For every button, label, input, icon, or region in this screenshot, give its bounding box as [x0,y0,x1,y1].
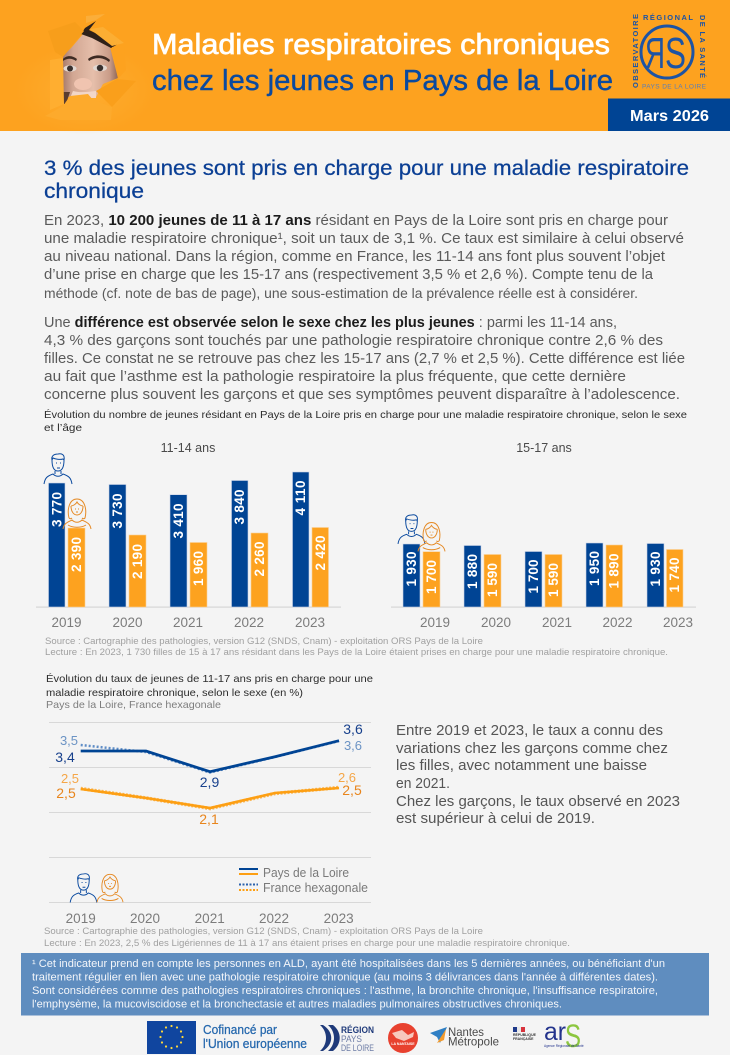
line chart: rate by sex: 2,6 [338,770,356,785]
legend: France hexagonale [263,881,368,895]
logo: République française: FRANÇAISE [513,1037,534,1041]
logo: Nantes Métropole: Métropole [448,1034,499,1048]
bar chart: 15-17 ans: 1 880 [465,554,480,589]
bar chart: 11-14 ans: 11-14 ans [161,441,215,455]
logo: observatoire régional de la santé [631,13,707,90]
logo: European Union co-funding: Cofinancé par [203,1023,277,1037]
bar chart: 15-17 ans: 1 700 [526,560,541,594]
commentary text: Entre 2019 et 2023, le taux a connu des [396,723,663,739]
logo: La Nantaise red badge: LA NANTAISE [391,1042,415,1046]
logo: Région Pays de la Loire: DE LOIRE [341,1043,374,1053]
section heading [44,156,689,203]
logo: observatoire régional de la santé: DE LA SANTÉ [698,15,707,78]
bar chart: 15-17 ans: 1 590 [485,563,500,597]
line chart: rate by sex: 2,9 [200,774,219,790]
bar chart: 15-17 ans: 1 930 [404,552,419,586]
bar chart heading: Évolution du nombre de jeunes résidant en Pays de la Loire pris en charge pour une maladie respiratoire chronique, selon le sexe [44,408,687,421]
bar chart: 11-14 ans: 2 390 [69,537,84,572]
text block: second paragraph: concerne plus souvent les garçons et que ses symptômes peuvent disparaître à l’adolescence. [44,386,680,403]
bar chart: 15-17 ans: 1 740 [667,558,682,592]
logo: Région Pays de la Loire: PAYS [341,1034,362,1044]
text block: second paragraph: au fait que l’asthme est la pathologie respiratoire la plus fréquente, que cette dernière [44,368,626,385]
logo: ARS: ar [544,1018,566,1046]
commentary text: les filles, avec notamment une baisse [396,758,647,774]
bar chart: 11-14 ans: 2019 [51,615,82,630]
bar chart: 11-14 ans: 4 110 [293,480,308,516]
line chart: rate by sex: 2019 [66,911,96,926]
date tag [608,98,730,131]
text block: first paragraph: au niveau national. Dans la région, comme en France, les 11-14 ans font plus souvent l’objet [44,248,666,265]
logo: observatoire régional de la santé: PAYS DE LA LOIRE [642,84,707,90]
photo: face peering through torn paper [45,14,136,120]
bar chart: 11-14 ans: 1 960 [191,551,206,586]
logo: observatoire régional de la santé: OBSERVATOIRE [631,14,640,88]
logo: République française [513,1027,537,1041]
bar chart: 11-14 ans: 2 190 [130,544,145,579]
bar chart: 11-14 ans: 3 770 [50,492,64,527]
bar chart: 15-17 ans: 1 930 [648,552,663,586]
commentary text: variations chez les garçons comme chez [396,741,668,757]
section heading: chronique [44,179,144,203]
logo: La Nantaise red badge [388,1023,418,1053]
bar chart: 15-17 ans: 2022 [602,615,633,630]
commentary text [396,723,680,827]
bar chart: 11-14 ans: 3 840 [232,490,247,524]
logo: observatoire régional de la santé: S [665,29,686,78]
legend [239,866,368,895]
title: Maladies respiratoires chroniques [152,29,610,61]
footnote panel: traitement régulier en lien avec une pathologie respiratoire chronique (au moins 3 délivrances dans l'année à différentes dates). [32,972,658,984]
line chart: rate by sex: 3,6 [343,721,363,737]
line chart: rate by sex: 2,1 [199,811,219,827]
line chart: rate by sex: 2020 [130,911,160,926]
logo: observatoire régional de la santé: R [645,29,665,78]
line chart: rate by sex: 2023 [324,911,354,926]
commentary text: est supérieur à celui de 2019. [396,811,595,827]
source note: line chart [44,926,570,949]
bar chart: 11-14 ans: 3 410 [171,504,186,538]
source note: bar chart: Source : Cartographie des pathologies, version G12 (SNDS, Cnam) - exploitation ORS Pays de la Loire [45,636,483,647]
source note: line chart: Lecture : En 2023, 2,5 % des Ligériennes de 11 à 17 ans étaient prises en charge pour une maladie respiratoire chronique. [44,938,570,949]
logo: République française: RÉPUBLIQUE [513,1032,537,1037]
bar chart: 15-17 ans: 15-17 ans [516,441,572,455]
line chart: rate by sex: 3,6 [344,738,362,753]
text block: second paragraph: filles. Ce constat ne se retrouve pas chez les 15-17 ans (2,7 % et 2,5 %). Cette différence est liée [44,350,685,367]
bar chart heading: et l’âge [44,422,82,434]
bar chart: 15-17 ans: 1 700 [424,560,439,594]
footnote panel [21,953,709,1016]
logo: ARS: Agence Régionale de Santé [544,1044,584,1048]
line chart heading [46,672,373,711]
logo: Nantes Métropole: Nantes [448,1025,484,1039]
logo: Région Pays de la Loire: RÉGION [341,1025,374,1035]
logo: Région Pays de la Loire [320,1025,374,1053]
bar chart: 15-17 ans: 2019 [420,615,450,630]
bar chart: 15-17 ans: 2021 [542,615,572,630]
logo: ARS: S [565,1018,581,1054]
line chart: rate by sex [49,721,371,926]
line chart: rate by sex: 2,5 [342,782,362,798]
bar chart: 11-14 ans [36,441,341,630]
section heading: 3 % des jeunes sont pris en charge pour une maladie respiratoire [44,156,689,180]
bar chart: 11-14 ans: 2022 [234,615,264,630]
icon: boy [398,515,425,544]
icon: girl [63,499,91,529]
line chart: rate by sex: 2,5 [56,785,76,801]
line chart heading: Pays de la Loire, France hexagonale [46,699,221,711]
bar chart: 15-17 ans: 2023 [663,615,693,630]
bar chart: 11-14 ans: 2021 [173,615,203,630]
title: chez les jeunes en Pays de la Loire [152,65,613,97]
header banner [0,0,730,135]
line chart: rate by sex: 2,5 [61,771,79,786]
bar chart: 15-17 ans: 1 890 [606,554,622,588]
legend: Pays de la Loire [263,866,349,880]
text block: second paragraph: 4,3 % des garçons sont touchés par une pathologie respiratoire chronique contre 2,6 % des [44,332,663,349]
text block: first paragraph: En 2023, 10 200 jeunes de 11 à 17 ans résidant en Pays de la Loire sont pris en charge pour [44,212,668,229]
logo: observatoire régional de la santé: RÉGIONAL [643,13,693,22]
text block: first paragraph [44,212,684,301]
source note: bar chart [45,636,668,658]
icon: boy [70,874,97,902]
source note: line chart: Source : Cartographie des pathologies, version G12 (SNDS, Cnam) - exploitation ORS Pays de la Loire [44,926,483,937]
line chart heading: Évolution du taux de jeunes de 11-17 ans pris en charge pour une [46,672,373,685]
bar chart: 11-14 ans: 3 730 [110,494,125,528]
date tag: Mars 2026 [630,108,709,125]
bar chart heading [44,408,687,434]
bar chart: 15-17 ans [391,441,696,630]
bar chart: 11-14 ans: 2 420 [313,536,328,570]
line chart heading: maladie respiratoire chronique, selon le sexe (en %) [46,687,303,699]
footnote panel: ¹ Cet indicateur prend en compte les personnes en ALD, ayant été hospitalisées dans les 5 dernières années, ou bénéficiant d'un [32,958,665,970]
bar chart: 11-14 ans: 2023 [295,615,325,630]
logo: European Union co-funding: l'Union européenne [203,1037,307,1051]
footnote panel: Sont considérées comme des pathologies respiratoires chroniques : l'asthme, la bronchite chronique, l'insuffisance respiratoire, [32,985,658,997]
commentary text: Chez les garçons, le taux observé en 2023 [396,794,680,810]
source note: bar chart: Lecture : En 2023, 1 730 filles de 15 à 17 ans résidant dans les Pays de la Loire étaient prises en charge pour une maladie respiratoire chronique. [45,647,668,658]
logo: European Union co-funding [147,1021,307,1054]
text block: first paragraph: une maladie respiratoire chronique¹, soit un taux de 3,1 %. Ce taux est similaire à celui observé [44,230,684,247]
bar chart: 15-17 ans: 2020 [481,615,511,630]
text block: first paragraph: méthode (cf. note de bas de page), une sous-estimation de la prévalence réelle est à considérer. [44,286,638,301]
logo: Nantes Métropole [430,1025,499,1048]
line chart: rate by sex: 2021 [195,911,225,926]
line chart: rate by sex: 3,4 [55,749,75,765]
footnote panel: l'emphysème, la mucoviscidose et la bronchectasie et autres maladies pulmonaires obstructives chroniques. [32,998,562,1010]
icon: girl [418,523,445,551]
icon: boy [44,454,72,484]
icon: girl [97,874,123,902]
text block: second paragraph: Une différence est observée selon le sexe chez les plus jeunes : parmi les 11-14 ans, [44,314,617,331]
line chart: rate by sex: 3,5 [60,733,78,748]
commentary text: en 2021. [396,776,450,792]
title [152,29,613,97]
bar chart: 15-17 ans: 1 590 [546,563,561,597]
bar chart: 11-14 ans: 2 260 [252,542,267,576]
line chart: rate by sex: 2022 [259,911,289,926]
bar chart: 15-17 ans: 1 950 [587,551,602,586]
text block: first paragraph: d’une prise en charge que les 15-17 ans (respectivement 3,5 % et 2,6 %). Compte tenu de la [44,266,654,283]
bar chart: 11-14 ans: 2020 [112,615,143,630]
logo: ARS [544,1018,584,1054]
text block: second paragraph [44,314,685,403]
